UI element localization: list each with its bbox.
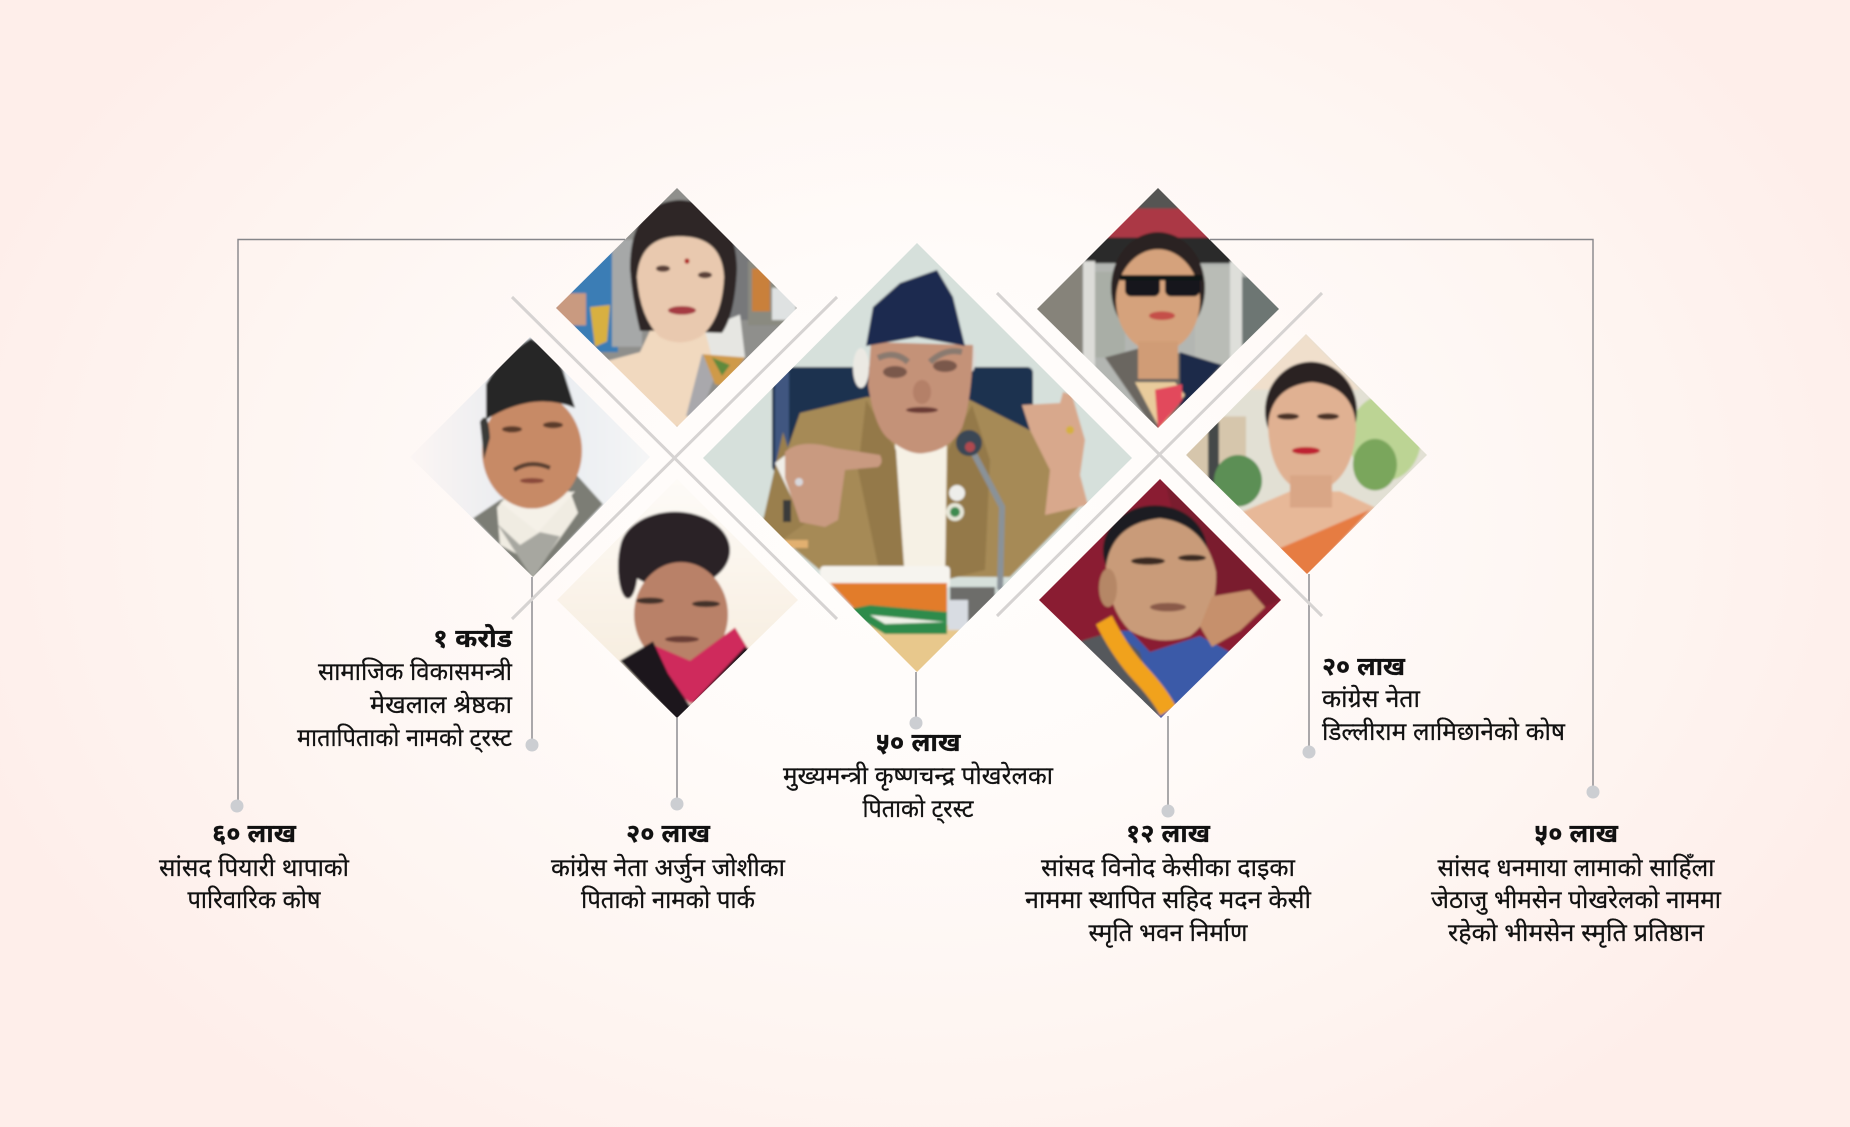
photo: man bottom left — [558, 510, 798, 718]
text: 20 lakh Dilli Ram fund: डिल्लीराम लामिछानेको कोष — [1322, 716, 1566, 746]
photo: woman top left — [550, 181, 800, 432]
text: 50 lakh chief minister trust — [783, 727, 1054, 824]
text: 20 lakh Dilli Ram fund: कांग्रेस नेता — [1322, 683, 1421, 713]
text: 50 lakh chief minister trust: ५० लाख — [876, 727, 962, 757]
photo: man bottom right — [1035, 475, 1285, 722]
photo: woman top right — [1037, 188, 1279, 428]
text: 50 lakh Bhimsen foundation — [1431, 818, 1722, 948]
photo: man left — [438, 337, 650, 577]
text: 50 lakh chief minister trust: पिताको ट्रस्ट — [862, 794, 974, 824]
text: 60 lakh family fund: सांसद पियारी थापाको — [159, 853, 350, 882]
left X divider — [512, 297, 837, 619]
right X divider — [997, 293, 1322, 616]
text: 1 crore parents trust: १ करोड — [433, 623, 513, 653]
text: 1 crore parents trust: मातापिताको नामको ट्रस्ट — [297, 723, 512, 753]
text: 60 lakh family fund: ६० लाख — [212, 818, 297, 848]
text: 1 crore parents trust — [297, 623, 513, 753]
text: 20 lakh park: कांग्रेस नेता अर्जुन जोशीका — [551, 852, 786, 883]
text: 50 lakh Bhimsen foundation: रहेको भीमसेन स्मृति प्रतिष्ठान — [1448, 917, 1705, 948]
text: 1 crore parents trust: सामाजिक विकासमन्त्री — [318, 657, 512, 686]
text: 12 lakh memorial hall: स्मृति भवन निर्माण — [1088, 918, 1248, 948]
text: 50 lakh Bhimsen foundation: जेठाजु भीमसेन पोखरेलको नाममा — [1431, 884, 1722, 915]
connector lines — [238, 240, 1593, 811]
text: 20 lakh Dilli Ram fund: २० लाख — [1322, 651, 1406, 681]
text: 20 lakh Dilli Ram fund — [1322, 651, 1566, 746]
text: 50 lakh chief minister trust: मुख्यमन्त्री कृष्णचन्द्र पोखरेलका — [783, 760, 1054, 791]
text: 12 lakh memorial hall: १२ लाख — [1126, 818, 1211, 848]
text: 50 lakh Bhimsen foundation: सांसद धनमाया लामाको साहिँला — [1438, 853, 1715, 882]
text: 20 lakh park: २० लाख — [626, 818, 711, 848]
connector dots — [230, 716, 1600, 818]
text: 60 lakh family fund — [159, 818, 350, 914]
text: 12 lakh memorial hall: सांसद विनोद केसीका दाइका — [1041, 852, 1296, 882]
text: 20 lakh park: पिताको नामको पार्क — [581, 885, 756, 914]
photo: chief minister centre — [700, 240, 1136, 676]
text: 12 lakh memorial hall — [1025, 818, 1312, 948]
text: 20 lakh park — [551, 818, 786, 914]
text: 12 lakh memorial hall: नाममा स्थापित सहिद मदन केसी — [1025, 884, 1312, 914]
text: 1 crore parents trust: मेखलाल श्रेष्ठका — [370, 689, 513, 719]
photo: woman right — [1180, 331, 1430, 577]
text: 60 lakh family fund: पारिवारिक कोष — [188, 885, 321, 914]
text: 50 lakh Bhimsen foundation: ५० लाख — [1534, 818, 1619, 848]
